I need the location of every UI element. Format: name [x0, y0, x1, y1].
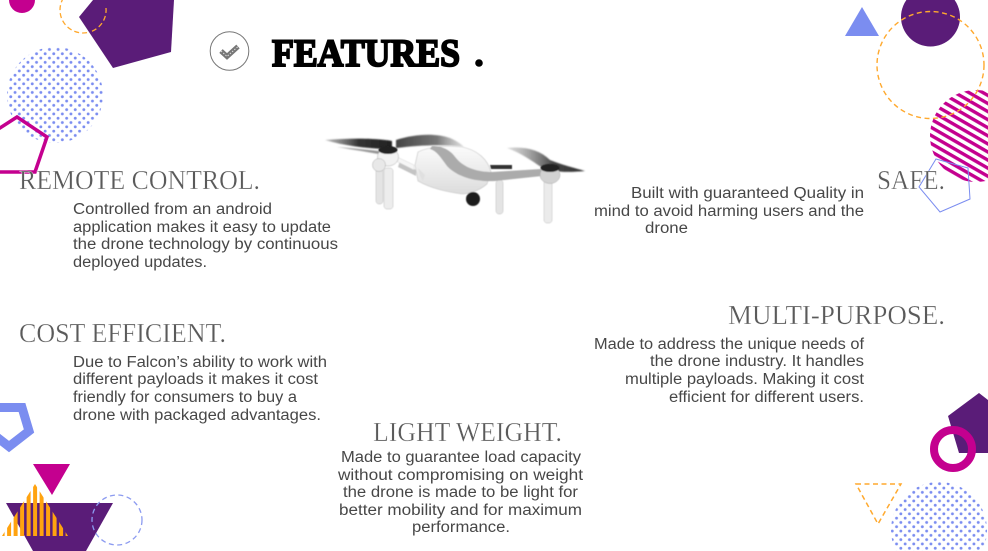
feature: light weight [337, 417, 584, 536]
text block: multi-purpose: the drone industry. It handles [650, 353, 864, 370]
decoration: top-right shapes [845, 0, 988, 212]
text block: safe: Built with guaranteed Quality in [631, 185, 864, 202]
text block: remote control: the drone technology by continuous [73, 236, 338, 253]
text block: safe: drone [645, 220, 688, 237]
text block: cost efficient: drone with packaged advantages. [73, 407, 321, 424]
decoration: bottom-left shapes [0, 408, 142, 551]
text block: multi-purpose: multiple payloads. Making it cost [625, 371, 865, 388]
text block: cost efficient [73, 354, 327, 424]
feature: remote control [19, 165, 338, 271]
text block: remote control: application makes it easy to update [73, 219, 331, 236]
text block: safe: mind to avoid harming users and the [594, 203, 864, 220]
text block: light weight: the drone is made to be light for [343, 484, 578, 501]
title: FEATURES [272, 32, 460, 75]
text block: multi-purpose: efficient for different users. [669, 389, 864, 406]
text block: light weight: Made to guarantee load capacity [341, 449, 581, 466]
text block: light weight [337, 449, 584, 536]
drone image [325, 135, 585, 223]
title: . [474, 32, 484, 75]
feature: multi-purpose [594, 300, 945, 406]
decoration: top-left shapes [0, 0, 174, 172]
icon: check mark in circle [210, 32, 249, 70]
text block: cost efficient: friendly for consumers to buy a [73, 389, 297, 406]
text block: remote control: deployed updates. [73, 254, 207, 271]
heading: multi-purpose: MULTI-PURPOSE. [728, 300, 945, 330]
text block: multi-purpose [594, 336, 865, 406]
text block: multi-purpose: Made to address the unique needs of [594, 336, 865, 353]
text block: light weight: performance. [412, 519, 510, 536]
text block: light weight: without compromising on weight [337, 467, 584, 484]
text block: remote control [73, 201, 338, 271]
decoration: bottom-right shapes [856, 393, 988, 551]
text block: safe [594, 185, 864, 237]
text block: remote control: Controlled from an android [73, 201, 272, 218]
text block: cost efficient: different payloads it makes it cost [73, 371, 319, 388]
text block: cost efficient: Due to Falcon’s ability to work with [73, 354, 327, 371]
feature: safe [594, 165, 945, 237]
text block: light weight: better mobility and for maximum [339, 502, 582, 519]
heading: remote control: REMOTE CONTROL. [19, 165, 260, 195]
heading: light weight: LIGHT WEIGHT. [373, 417, 562, 447]
feature: cost efficient [19, 318, 327, 424]
heading: safe: SAFE. [877, 165, 945, 195]
heading: cost efficient: COST EFFICIENT. [19, 318, 226, 348]
